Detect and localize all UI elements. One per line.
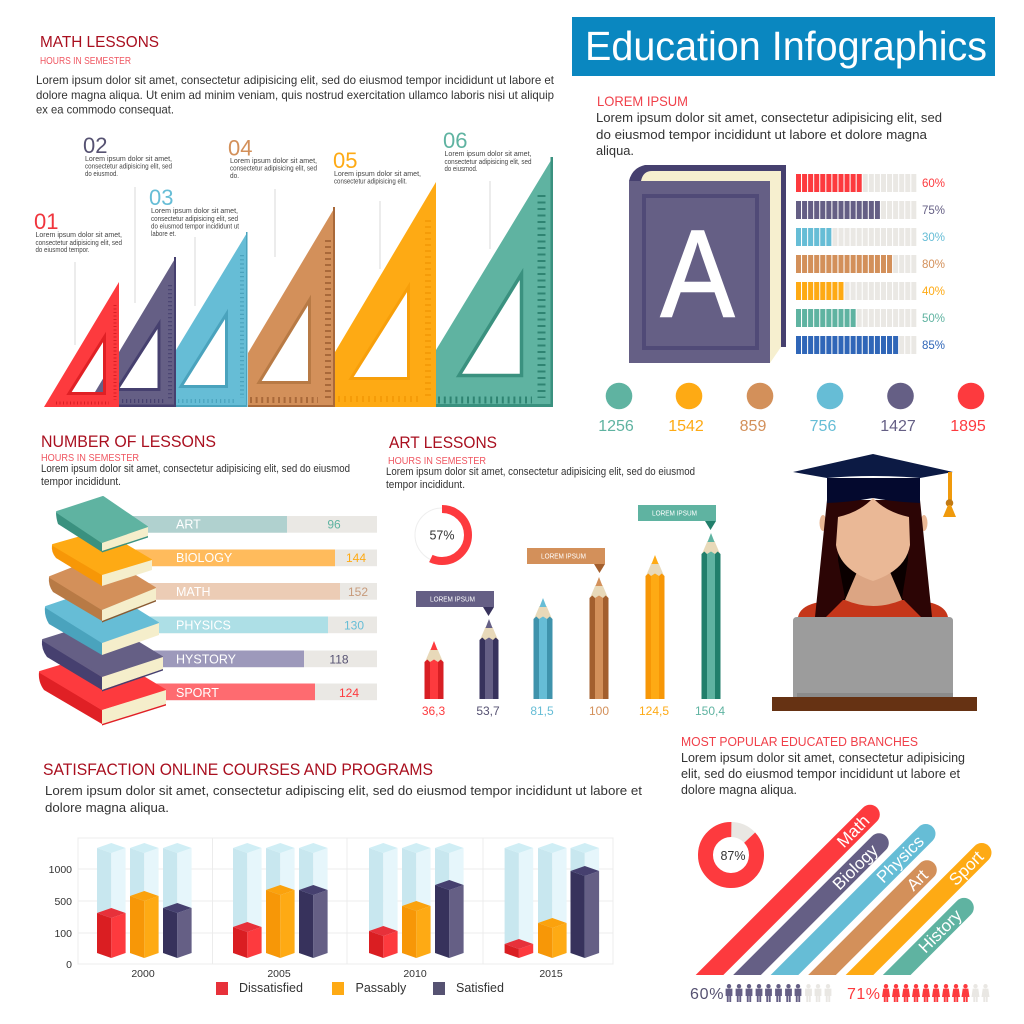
- columns year 2015: [505, 843, 599, 958]
- legend: colored circles with totals: 1542: [668, 418, 704, 435]
- panel: satisfaction heading: SATISFACTION ONLINE COURSES AND PROGRAMS: [43, 760, 433, 779]
- step labels: Lorem ipsum dolor sit amet,: [444, 151, 532, 158]
- step labels: 05: [333, 148, 357, 173]
- panel: art lessons heading: HOURS IN SEMESTER: [388, 455, 486, 467]
- step labels: consectetur adipisicing elit, sed: [230, 166, 317, 172]
- step labels: do eiusmod tempor incididunt ut: [151, 224, 239, 230]
- panel: math lessons heading: MATH LESSONS: [40, 34, 159, 51]
- step labels: 03: [149, 185, 173, 210]
- y axis labels: 1000: [49, 864, 72, 876]
- panel: lorem ipsum heading: [596, 93, 942, 158]
- panel: art lessons heading: [386, 433, 695, 491]
- panel: number of lessons heading: [41, 432, 350, 488]
- set square 06 green: [436, 157, 553, 407]
- chart: horizontal subject bars: 124: [339, 686, 359, 700]
- chart: diagonal branch bars: Art: [903, 866, 932, 895]
- chart: segmented percentage bars: 40%: [922, 286, 945, 298]
- x axis labels: [131, 968, 563, 980]
- step labels: [34, 128, 532, 254]
- pencil value labels: 81,5: [530, 704, 554, 718]
- step labels: do eiusmod tempor.: [36, 247, 90, 254]
- panel: numbered set squares: [34, 128, 553, 407]
- chart: segmented percentage bars: [796, 178, 945, 352]
- panel: number of lessons heading: HOURS IN SEMESTER: [41, 452, 139, 464]
- pencil value labels: 53,7: [476, 704, 500, 718]
- callout: purple lorem ipsum tag: LOREM IPSUM: [430, 596, 475, 604]
- set square 05 orange: [335, 182, 436, 407]
- panel: most popular branches heading: elit, sed do eiusmod tempor incididunt ut labore et: [681, 767, 961, 781]
- chart: horizontal subject bars: 96: [327, 518, 341, 532]
- pencil value labels: 150,4: [695, 704, 725, 718]
- legend: satisfaction: Satisfied: [456, 981, 504, 995]
- y axis labels: 500: [54, 896, 72, 908]
- donut chart: 87%: [695, 819, 767, 891]
- legend: colored circles with totals: 1256: [598, 418, 634, 435]
- legend: colored circles with totals: 756: [810, 418, 836, 435]
- legend: satisfaction: [216, 981, 504, 995]
- chart: horizontal subject bars: HYSTORY: [176, 652, 237, 666]
- columns year 2005: [233, 843, 328, 958]
- x axis labels: 2005: [267, 968, 291, 980]
- step labels: labore et.: [151, 231, 176, 238]
- step labels: 04: [228, 136, 252, 160]
- donut chart: 57%: 57%: [429, 528, 455, 542]
- icon: book with letter A: [629, 165, 786, 363]
- y axis labels: 0: [66, 959, 72, 971]
- set square 03 blue: [176, 232, 248, 407]
- chart: horizontal subject bars: PHYSICS: [176, 618, 231, 632]
- chart: segmented percentage bars: 75%: [922, 205, 945, 217]
- set square 01 red: [44, 282, 119, 407]
- panel: math lessons heading: dolore magna aliqua. Ut enim ad minim veniam, quis nostrud exercitation ullamco laboris nisi ut aliquip: [36, 88, 554, 102]
- chart: segmented percentage bars: 50%: [922, 313, 945, 325]
- title banner: Education Infographics: [585, 23, 987, 69]
- legend: satisfaction: Passably: [356, 981, 407, 995]
- legend: colored circles with totals: 859: [740, 418, 766, 435]
- panel: lorem ipsum heading: aliqua.: [596, 143, 634, 158]
- panel: art lessons heading: Lorem ipsum dolor sit amet, consectetur adipisicing elit, sed do eiusmod: [386, 466, 695, 478]
- panel: math lessons heading: HOURS IN SEMESTER: [40, 55, 131, 67]
- legend: colored circles with totals: [598, 383, 986, 435]
- step labels: consectetur adipisicing elit.: [334, 178, 407, 186]
- step labels: Lorem ipsum dolor sit amet,: [36, 232, 122, 239]
- x axis labels: 2015: [539, 968, 563, 980]
- icon: graduate at laptop: [772, 454, 977, 711]
- callout: brown lorem ipsum tag: [527, 548, 605, 573]
- step labels: 02: [83, 133, 107, 158]
- callout: green lorem ipsum tag: [638, 505, 716, 530]
- set square 04 brown: [248, 207, 335, 407]
- pencil value labels: [422, 704, 725, 718]
- step labels: consectetur adipisicing elit, sed: [151, 216, 238, 223]
- step labels: do.: [230, 173, 239, 180]
- step labels: Lorem ipsum dolor sit amet,: [334, 171, 421, 178]
- chart: diagonal branch bars: Biology: [829, 841, 882, 894]
- chart: horizontal subject bars: 144: [346, 551, 366, 565]
- panel: most popular branches heading: [681, 735, 965, 797]
- chart: pencil bars: [422, 533, 725, 718]
- chart: diagonal branch bars: Sport: [945, 847, 988, 889]
- step labels: consectetur adipisicing elit, sed: [36, 240, 122, 247]
- chart: horizontal subject bars: SPORT: [176, 686, 219, 700]
- donut chart: 57%: [415, 508, 469, 562]
- chart: diagonal branch bars: Math: [833, 811, 873, 851]
- set square 02 purple: [86, 257, 176, 407]
- step labels: Lorem ipsum dolor sit amet,: [151, 208, 238, 215]
- panel: art lessons heading: ART LESSONS: [389, 433, 497, 452]
- legend: satisfaction: Dissatisfied: [239, 981, 303, 995]
- panel: most popular branches heading: MOST POPULAR EDUCATED BRANCHES: [681, 735, 918, 749]
- chart: horizontal subject bars: BIOLOGY: [176, 551, 233, 565]
- x axis labels: 2010: [403, 968, 427, 980]
- panel: number of lessons heading: tempor incididunt.: [41, 476, 121, 488]
- chart: horizontal subject bars: MATH: [176, 585, 210, 599]
- panel: math lessons heading: Lorem ipsum dolor sit amet, consectetur adipisicing elit, sed do eiusmod tempor incididunt ut labore et: [36, 73, 555, 87]
- pencil: 53,7: [480, 619, 498, 699]
- panel: most popular branches heading: Lorem ipsum dolor sit amet, consectetur adipisicing: [681, 751, 965, 765]
- pencil: 124,5: [646, 555, 664, 699]
- icon: book with letter A: A: [660, 206, 735, 344]
- callout: green lorem ipsum tag: LOREM IPSUM: [652, 510, 697, 518]
- x axis labels: 2000: [131, 968, 155, 980]
- chart: 3D satisfaction columns: [49, 838, 613, 980]
- panel: math lessons heading: [36, 34, 555, 116]
- pictogram: 60% men: 60%: [690, 986, 724, 1003]
- step labels: Lorem ipsum dolor sit amet,: [230, 158, 317, 165]
- panel: lorem ipsum heading: LOREM IPSUM: [597, 93, 688, 109]
- panel: most popular branches heading: dolore magna aliqua.: [681, 783, 797, 797]
- step labels: do eiusmod.: [85, 171, 118, 178]
- chart: horizontal subject bars: 152: [348, 585, 368, 599]
- chart: segmented percentage bars: 60%: [922, 178, 945, 190]
- chart: segmented percentage bars: 30%: [922, 232, 945, 244]
- chart: horizontal subject bars: 118: [329, 652, 349, 666]
- step labels: 06: [443, 128, 467, 153]
- step labels: consectetur adipisicing elit, sed: [85, 164, 172, 170]
- chart: diagonal branch bars: History: [915, 906, 966, 957]
- pictogram: 71% women: [847, 984, 990, 1003]
- pencil: 150,4: [702, 533, 720, 699]
- panel: art lessons heading: tempor incididunt.: [386, 479, 465, 491]
- panel: lorem ipsum heading: do eiusmod tempor incididunt ut labore et dolore magna: [596, 127, 928, 142]
- chart: horizontal subject bars: [130, 516, 377, 700]
- panel: satisfaction heading: [43, 760, 642, 815]
- legend: colored circles with totals: 1427: [880, 418, 916, 435]
- chart: segmented percentage bars: 80%: [922, 259, 945, 271]
- chart: diagonal branch bars: [690, 811, 988, 994]
- callout: brown lorem ipsum tag: LOREM IPSUM: [541, 554, 586, 560]
- pictogram: 60% men: [690, 984, 831, 1003]
- step labels: Lorem ipsum dolor sit amet,: [85, 156, 172, 163]
- panel: math lessons heading: ex ea commodo consequat.: [36, 102, 174, 116]
- columns year 2010: [369, 843, 464, 958]
- panel: number of lessons heading: Lorem ipsum dolor sit amet, consectetur adipisicing elit, sed do eiusmod: [41, 463, 350, 475]
- pencil: 36,3: [424, 641, 444, 699]
- panel: satisfaction heading: Lorem ipsum dolor sit amet, consectetur adipiscing elit, sed do eiusmod tempor incididunt ut labore et: [45, 783, 642, 798]
- icon: stack of books: [39, 497, 166, 726]
- pictogram: 71% women: 71%: [847, 986, 880, 1003]
- pencil value labels: 100: [589, 704, 609, 718]
- panel: satisfaction heading: dolore magna aliqua.: [45, 800, 169, 815]
- panel: lorem ipsum heading: Lorem ipsum dolor sit amet, consectetur adipisicing elit, sed: [596, 110, 942, 125]
- step labels: do eiusmod.: [444, 166, 478, 173]
- y axis labels: [49, 864, 72, 971]
- y axis labels: 100: [54, 928, 72, 940]
- chart: segmented percentage bars: 85%: [922, 340, 945, 352]
- chart: horizontal subject bars: 130: [344, 618, 364, 632]
- step labels: 01: [34, 209, 58, 234]
- pencil value labels: 36,3: [422, 704, 446, 718]
- chart: horizontal subject bars: ART: [176, 518, 201, 532]
- donut chart: 87%: 87%: [720, 849, 746, 863]
- step labels: consectetur adipisicing elit, sed: [444, 159, 532, 166]
- legend: colored circles with totals: 1895: [950, 418, 986, 435]
- panel: number of lessons heading: NUMBER OF LESSONS: [41, 432, 216, 451]
- callout: purple lorem ipsum tag: [416, 591, 494, 616]
- chart: diagonal branch bars: Physics: [873, 832, 928, 887]
- columns year 2000: [97, 843, 192, 958]
- pencil: 81,5: [534, 598, 552, 699]
- pencil: 100: [590, 577, 608, 699]
- pencil value labels: 124,5: [639, 704, 669, 718]
